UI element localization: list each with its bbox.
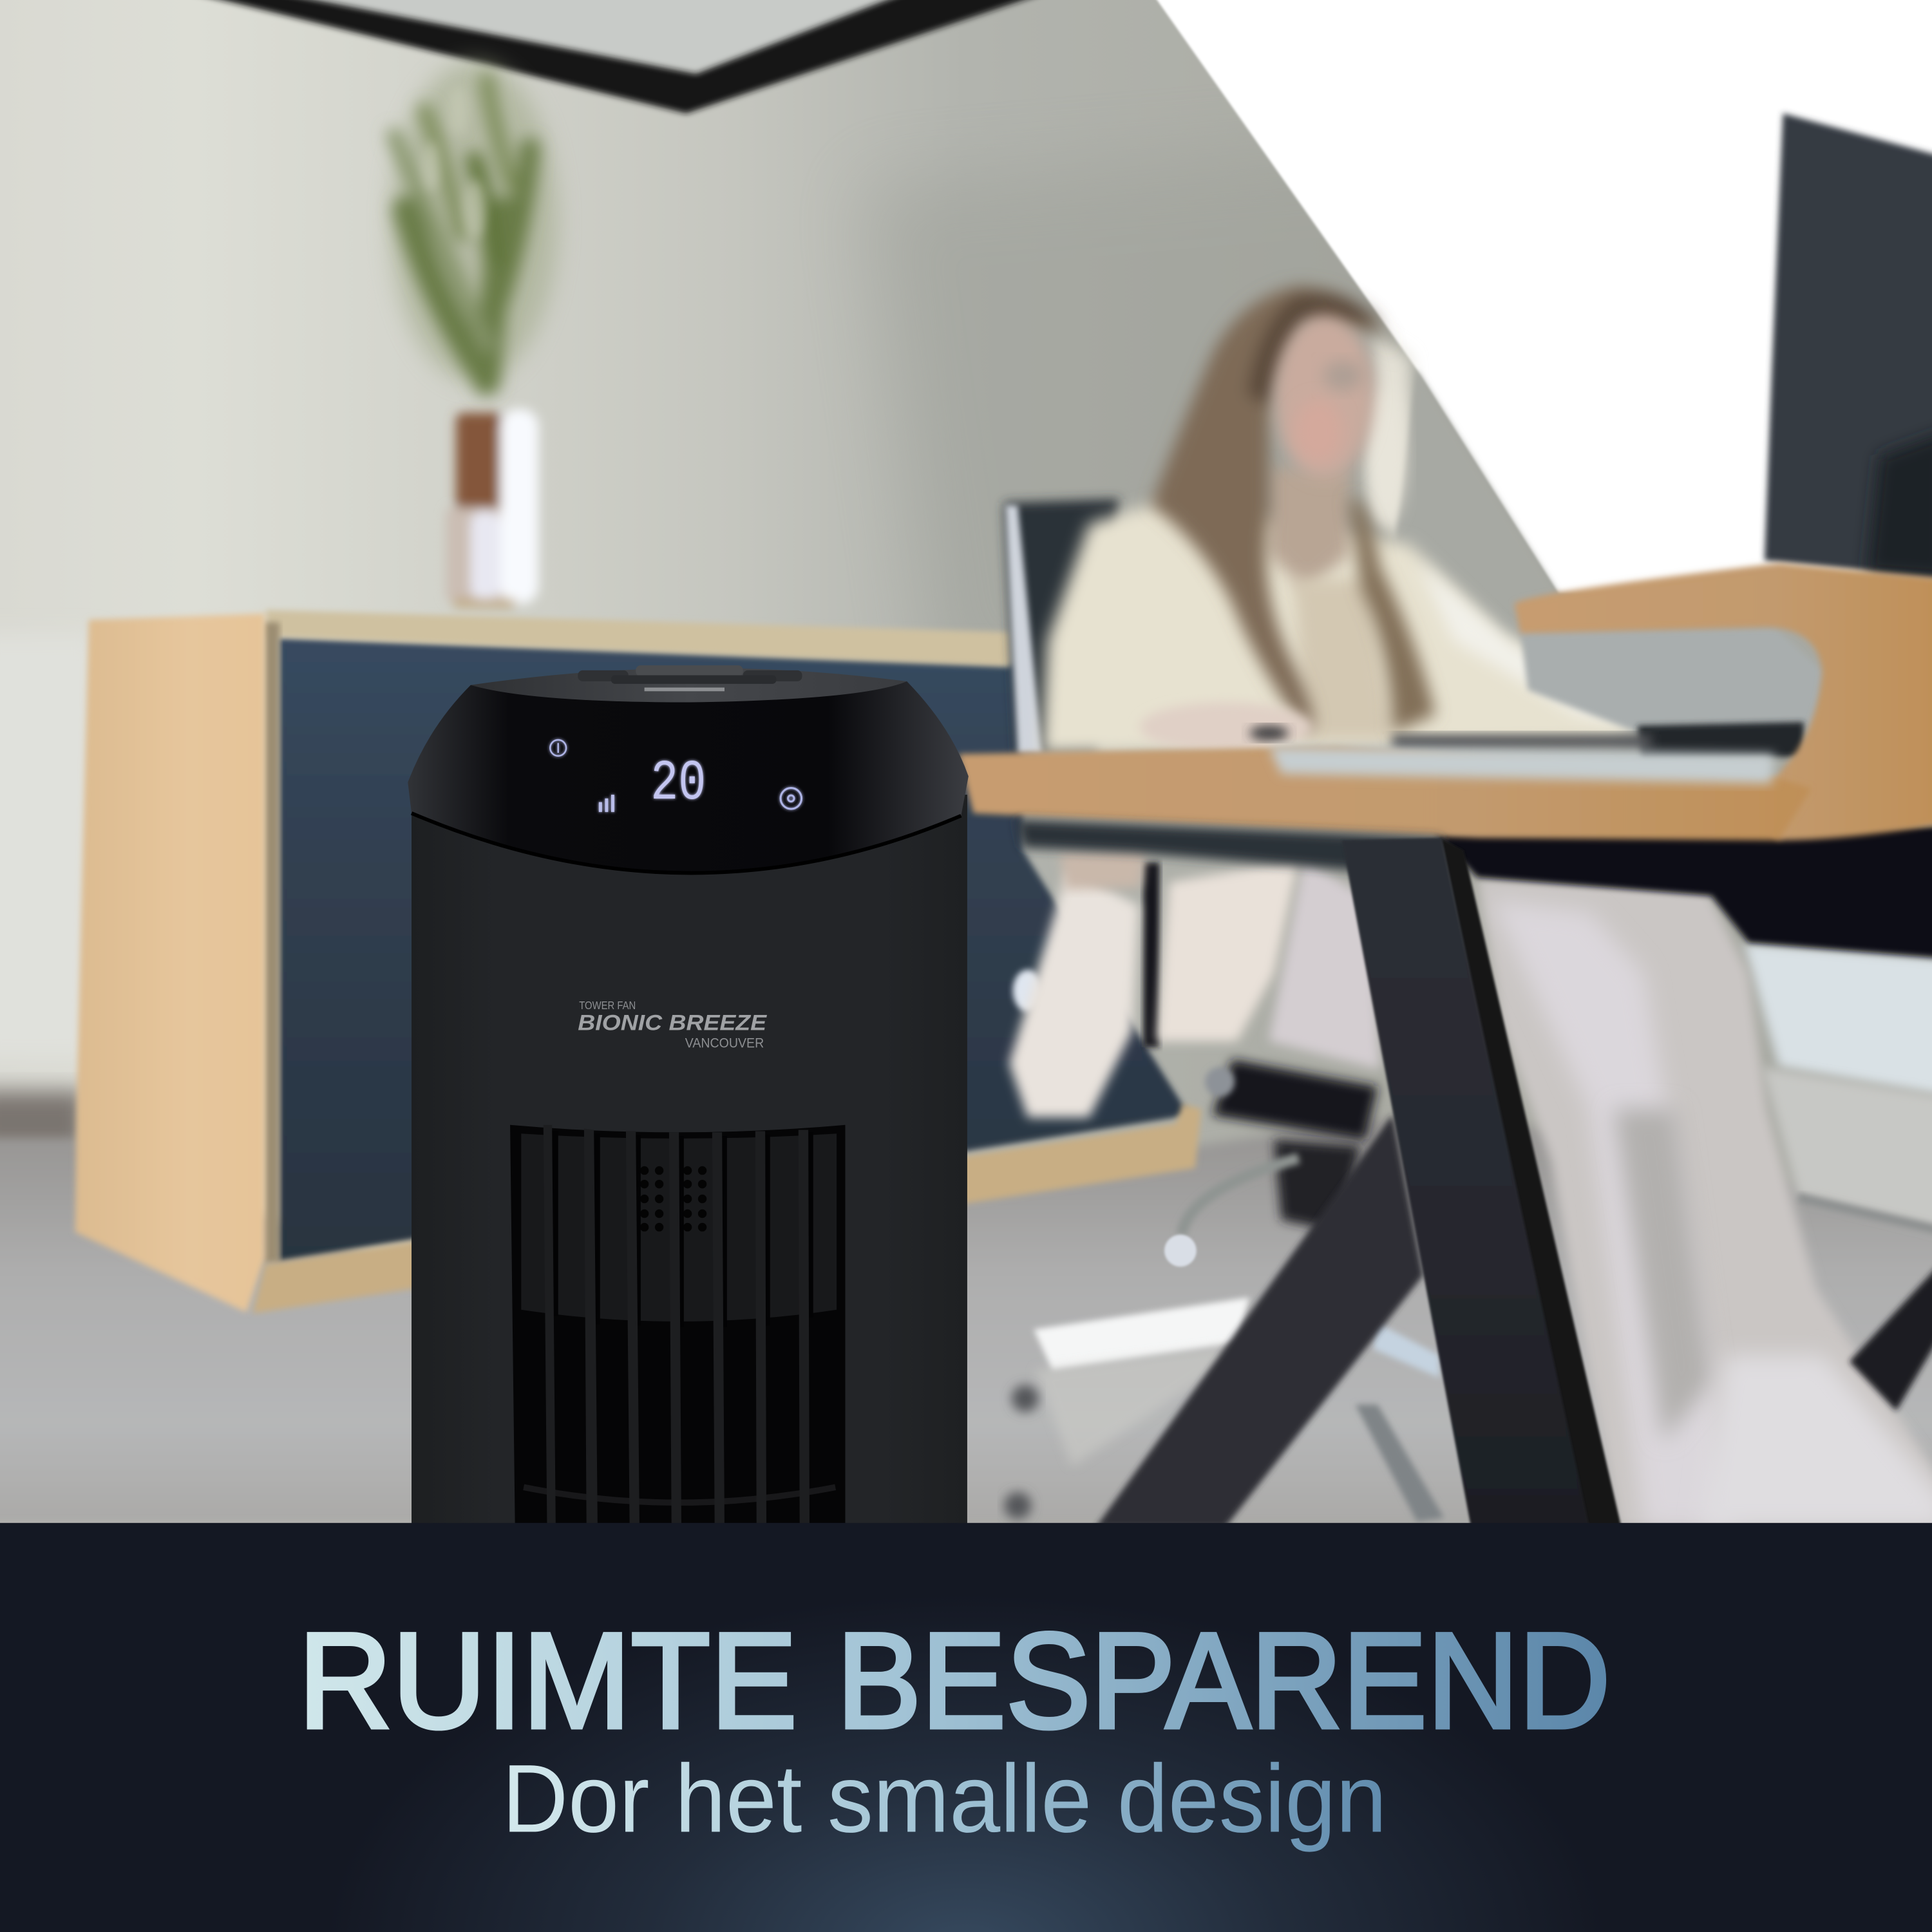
- ceiling beam: [173, 0, 1059, 113]
- plant foliage haze: [391, 62, 558, 382]
- bright window: [1148, 0, 1932, 603]
- power icon: [550, 740, 566, 756]
- hair: [1151, 286, 1435, 733]
- bokeh dot lower: [1205, 1067, 1235, 1097]
- window under desk: [1743, 943, 1932, 1097]
- seam: [412, 813, 961, 873]
- thigh: [1269, 860, 1380, 1070]
- heading: RUIMTE: [298, 1604, 797, 1756]
- jacket upper strip: [1059, 850, 1146, 889]
- cabinet blue front: [278, 637, 1189, 1262]
- monitor stand: [1867, 431, 1932, 579]
- computer monitor: [1765, 113, 1932, 579]
- desk gap background: [1520, 627, 1824, 733]
- desk leg dark edge: [1441, 838, 1622, 1528]
- chair foot highlight: [1034, 1298, 1249, 1370]
- mouse: [1249, 726, 1289, 741]
- keyboard: [1392, 734, 1651, 752]
- chair casters: [1004, 1385, 1039, 1519]
- cabinet inner edge: [263, 622, 279, 1263]
- desk surface highlight: [1269, 746, 1774, 784]
- hair dark: [1247, 293, 1380, 406]
- desk under bar: [1434, 826, 1932, 959]
- chair spoke lower: [1356, 1405, 1444, 1522]
- blouse: [1294, 579, 1392, 739]
- desk: [959, 563, 1932, 1528]
- tower fan: [408, 665, 969, 1528]
- eyes shadow: [1323, 361, 1363, 391]
- chair base arm: [1182, 1158, 1299, 1235]
- subheading: Dor het smalle design: [502, 1744, 1387, 1852]
- trousers: [1477, 877, 1932, 1528]
- face: [1275, 316, 1374, 478]
- chair arm post: [1144, 862, 1159, 1047]
- grill bars: [544, 1125, 810, 1528]
- plant leaves: [394, 80, 530, 382]
- lower left wall: [0, 634, 99, 1059]
- hair crown: [1151, 286, 1395, 733]
- trouser shadow: [1614, 1109, 1712, 1442]
- chair post: [1274, 1140, 1360, 1232]
- vase: [446, 409, 538, 607]
- office chair: [1004, 499, 1444, 1522]
- hair right lock: [1349, 498, 1435, 733]
- fan body: [412, 795, 967, 1528]
- chair spoke: [1035, 1345, 1232, 1466]
- skirting left: [0, 1090, 86, 1152]
- jacket lower right: [1157, 860, 1299, 1041]
- cabinet wood side: [75, 614, 265, 1312]
- sleeve highlight: [1417, 561, 1639, 727]
- brand label: [578, 999, 767, 1050]
- grill opening: [510, 1125, 845, 1528]
- chair spoke right: [1374, 1321, 1439, 1378]
- trouser hem: [1700, 1356, 1932, 1528]
- window side haze: [1374, 333, 1417, 554]
- cheek: [1294, 399, 1343, 463]
- skirting line right: [1797, 1198, 1932, 1232]
- chair seat: [1213, 1059, 1378, 1140]
- cabinet bottom edge: [252, 1104, 1201, 1314]
- jacket: [1041, 499, 1643, 754]
- wall: [0, 0, 1932, 1528]
- keyboard and dock: [1638, 722, 1804, 759]
- trouser highlight: [1491, 900, 1736, 1528]
- hand: [1140, 703, 1312, 752]
- office background photo: [0, 0, 1932, 1528]
- panel background: [0, 1523, 1932, 1932]
- desk leg diagonal: [1095, 1115, 1423, 1528]
- chair metal frame: [1005, 505, 1043, 754]
- temperature display: 20: [650, 752, 706, 816]
- cabinet: [75, 610, 1201, 1314]
- heading: [298, 1604, 1611, 1756]
- plant highlights: [422, 86, 486, 239]
- jacket lower left: [1009, 869, 1139, 1117]
- neck and chest: [1269, 468, 1349, 591]
- chair wheel: [1164, 1235, 1197, 1267]
- desk curved shelf: [1514, 563, 1932, 840]
- fan grill: [510, 1125, 845, 1528]
- plant: [391, 62, 558, 382]
- heading: BESPAREND: [837, 1604, 1611, 1756]
- chair back: [1004, 499, 1119, 754]
- grill bar shadows: [552, 1131, 813, 1327]
- woman at desk: [1009, 286, 1932, 1528]
- skirting right: [1762, 1067, 1932, 1232]
- brand label: TOWER FAN: [579, 999, 636, 1012]
- signal icon: [599, 795, 614, 812]
- floor: [0, 1109, 1932, 1528]
- brand label: VANCOUVER: [685, 1036, 764, 1050]
- oscillation icon: [781, 788, 802, 809]
- desk top: [959, 746, 1811, 840]
- brand label: BIONIC BREEZE: [578, 1010, 767, 1035]
- speaker holes: [640, 1166, 706, 1231]
- control buttons: [578, 665, 802, 691]
- bottom text panel: [0, 1523, 1932, 1932]
- lower ring: [524, 1487, 835, 1502]
- ceiling recess: [216, 0, 973, 77]
- hair halo: [1365, 388, 1405, 524]
- desk leg right: [1850, 1257, 1932, 1411]
- right wall below window: [1392, 370, 1824, 727]
- cabinet top edge: [266, 610, 1010, 667]
- wall shadow right: [862, 123, 1725, 739]
- under desk shadow: [1016, 819, 1442, 877]
- desk leg main: [1342, 838, 1589, 1528]
- inner cylinder: [521, 1133, 837, 1321]
- fan lid: [408, 681, 969, 873]
- bokeh dot: [1013, 970, 1043, 1012]
- fan lid top: [471, 668, 907, 703]
